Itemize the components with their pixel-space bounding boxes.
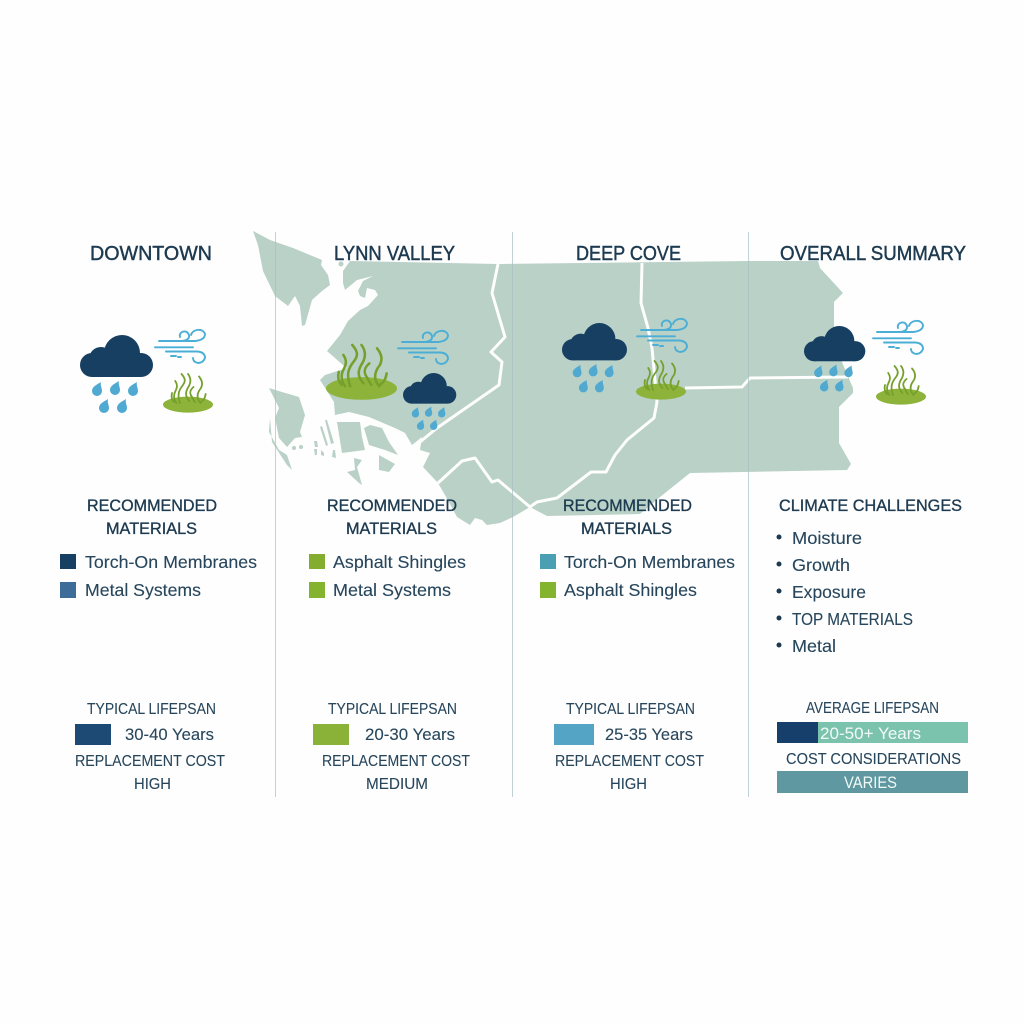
lifespan bbox=[75, 701, 216, 745]
small islands bbox=[269, 262, 398, 485]
icon: moss bbox=[876, 366, 926, 405]
recommended materials heading bbox=[563, 496, 692, 538]
region borders bbox=[420, 263, 848, 507]
column: Downtown bbox=[60, 243, 257, 793]
recommended materials heading: RECOMMENDED bbox=[327, 496, 457, 515]
lifespan: TYPICAL LIFEPSAN bbox=[87, 701, 216, 718]
climate challenges heading: CLIMATE CHALLENGES bbox=[779, 496, 962, 515]
average lifespan: AVERAGE LIFEPSAN bbox=[806, 700, 939, 717]
replacement cost: REPLACEMENT COST bbox=[75, 753, 225, 770]
column: Overall Summary bbox=[776, 243, 968, 793]
icon: rain cloud bbox=[562, 323, 627, 392]
lifespan: 25-35 Years bbox=[605, 726, 693, 744]
lifespan: TYPICAL LIFEPSAN bbox=[566, 701, 695, 718]
replacement cost: HIGH bbox=[134, 776, 171, 793]
average lifespan bbox=[777, 700, 968, 743]
cost considerations: VARIES bbox=[844, 774, 897, 792]
climate challenges list: Exposure bbox=[792, 582, 866, 602]
column: Deep Cove bbox=[540, 243, 735, 793]
material: Asphalt Shingles: Asphalt Shingles bbox=[333, 552, 466, 572]
icon: moss bbox=[163, 374, 213, 413]
column: Lynn Valley bbox=[309, 243, 470, 793]
icon: wind bbox=[637, 319, 687, 352]
icon: wind bbox=[873, 321, 923, 354]
icon: rain cloud bbox=[403, 373, 456, 430]
icon: moss bbox=[636, 361, 686, 400]
icon: rain cloud bbox=[80, 335, 153, 413]
heading: LYNN VALLEY bbox=[334, 243, 455, 265]
lifespan: 30-40 Years bbox=[125, 726, 214, 744]
climate challenges list: TOP MATERIALS bbox=[792, 609, 913, 629]
material: Torch-On Membranes: Torch-On Membranes bbox=[85, 552, 257, 572]
recommended materials heading bbox=[327, 496, 457, 538]
mainland bbox=[320, 261, 853, 525]
average lifespan: 20-50+ Years bbox=[820, 725, 921, 743]
climate challenges list: Growth bbox=[792, 555, 850, 575]
heading: OVERALL SUMMARY bbox=[780, 243, 966, 265]
icon: rain cloud bbox=[804, 326, 865, 392]
icon: wind bbox=[398, 331, 448, 364]
material: Torch-On Membranes: Torch-On Membranes bbox=[564, 552, 735, 572]
icon: moss bbox=[326, 345, 397, 400]
replacement cost: REPLACEMENT COST bbox=[322, 753, 470, 770]
material: Metal Systems: Metal Systems bbox=[333, 580, 451, 600]
heading: DEEP COVE bbox=[576, 243, 681, 265]
climate challenges list bbox=[776, 528, 913, 656]
recommended materials heading: RECOMMENDED bbox=[563, 496, 692, 515]
lifespan bbox=[554, 701, 695, 745]
material: Metal Systems: Metal Systems bbox=[85, 580, 201, 600]
recommended materials heading: MATERIALS bbox=[346, 519, 437, 538]
recommended materials heading: RECOMMENDED bbox=[87, 496, 217, 515]
replacement cost: HIGH bbox=[610, 776, 647, 793]
material: Asphalt Shingles: Asphalt Shingles bbox=[564, 580, 697, 600]
lifespan: TYPICAL LIFEPSAN bbox=[328, 701, 457, 718]
replacement cost bbox=[75, 753, 225, 793]
replacement cost bbox=[322, 753, 470, 793]
replacement cost bbox=[555, 753, 704, 793]
replacement cost: MEDIUM bbox=[366, 776, 428, 793]
recommended materials heading bbox=[87, 496, 217, 538]
heading: DOWNTOWN bbox=[90, 243, 212, 265]
climate challenges list: Moisture bbox=[792, 528, 862, 548]
icon: wind bbox=[155, 330, 205, 363]
cost considerations: COST CONSIDERATIONS bbox=[786, 751, 961, 768]
replacement cost: REPLACEMENT COST bbox=[555, 753, 704, 770]
recommended materials heading: MATERIALS bbox=[581, 519, 672, 538]
climate challenges list: Metal bbox=[792, 636, 836, 656]
cost considerations bbox=[777, 751, 968, 793]
column dividers bbox=[276, 232, 748, 797]
lifespan bbox=[313, 701, 457, 745]
recommended materials heading: MATERIALS bbox=[106, 519, 197, 538]
map background bbox=[253, 231, 853, 525]
northwest island bbox=[253, 231, 330, 326]
lifespan: 20-30 Years bbox=[365, 726, 455, 744]
